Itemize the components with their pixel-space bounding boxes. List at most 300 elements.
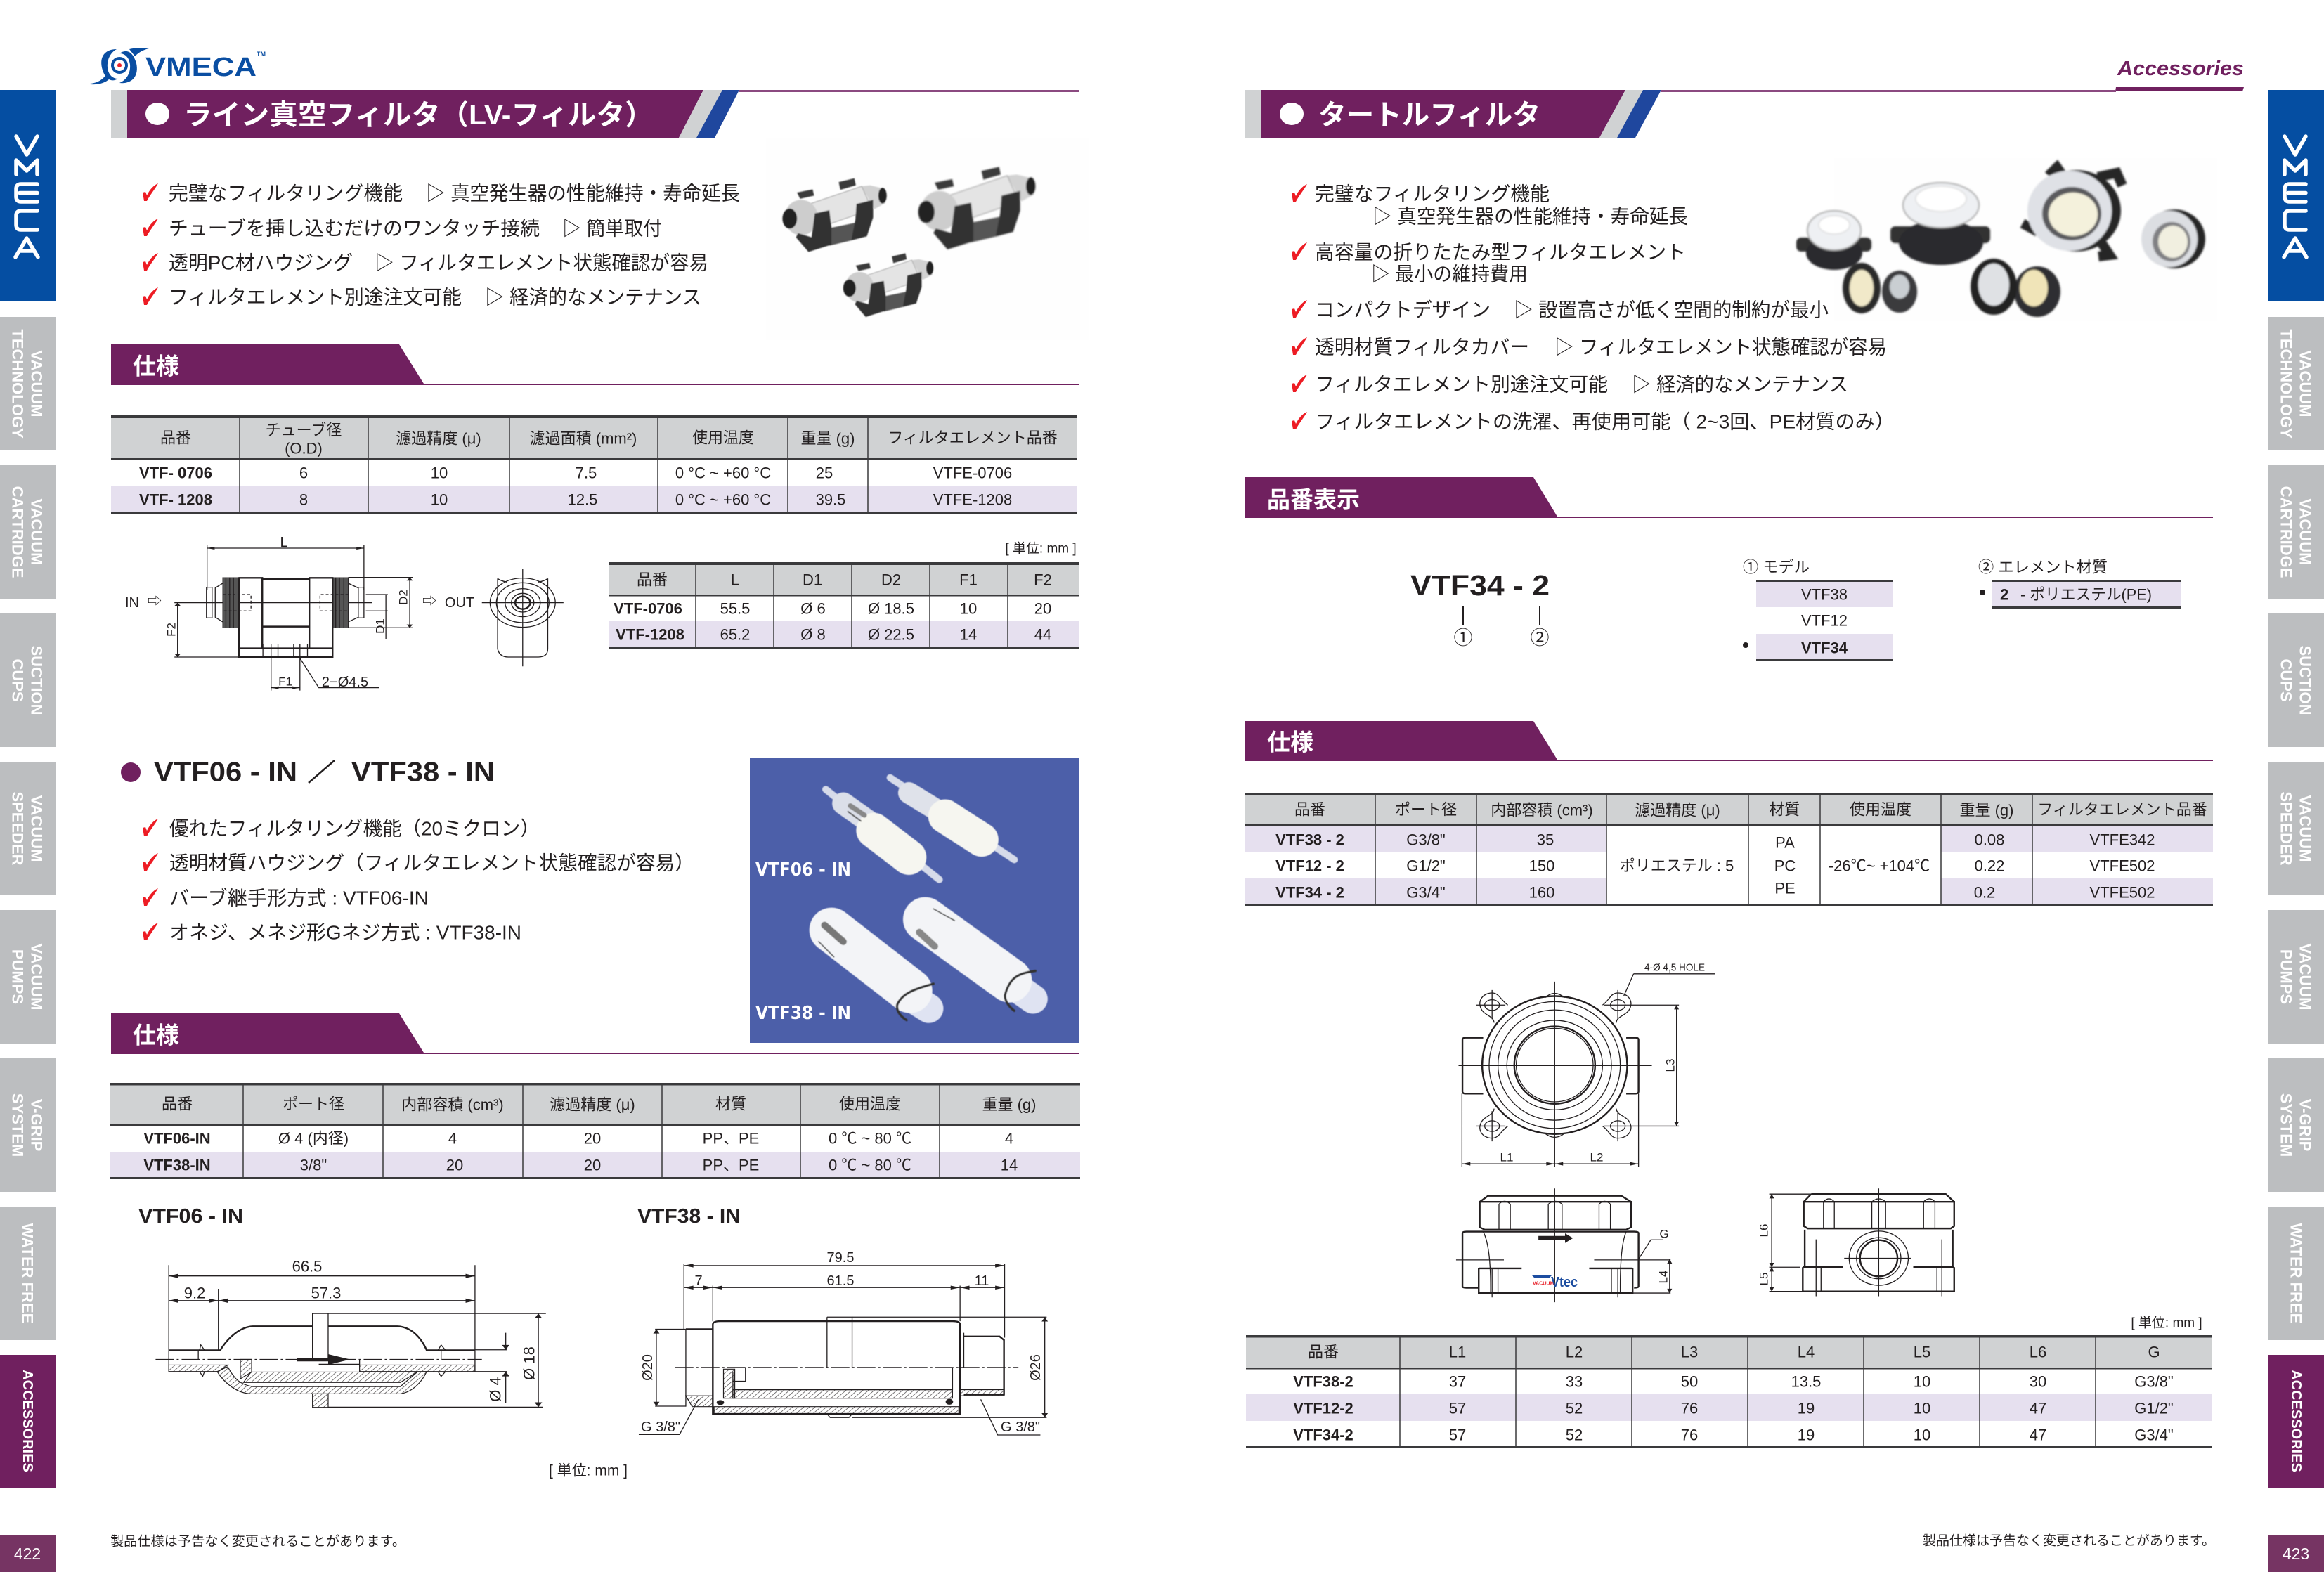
tab: v-grip system: V-GRIP [28, 1099, 45, 1151]
table: turtle filter spec: 0.22 [1975, 857, 2004, 874]
drawing: top view [1458, 974, 1715, 1167]
table: LV filter dimensions: Ø 22.5 [868, 625, 914, 644]
table: VTF-IN spec: 0 ℃ ~ 80 ℃ [829, 1130, 911, 1147]
table: LV filter dimensions: L [731, 571, 739, 589]
table: LV filter spec: 7.5 [576, 464, 597, 482]
feature list: line vacuum filter: 完璧なフィルタリング機能 [169, 183, 403, 204]
tab: vacuum speeder [0, 762, 56, 895]
table: turtle filter dimensions: L1 [1449, 1344, 1466, 1360]
drawing title: VTF38-IN: VTF38 - IN [637, 1205, 741, 1228]
table: turtle filter spec: VTF12 - 2 [1275, 857, 1344, 874]
table: turtle filter dimensions: 76 [1681, 1427, 1698, 1443]
tab: vacuum cartridge: CARTRIDGE [2277, 486, 2295, 578]
tab: accessories: ACCESSORIES [20, 1370, 35, 1472]
table: LV filter spec: (O.D) [285, 440, 323, 457]
table: VTF-IN spec: 20 [446, 1157, 463, 1174]
table: VTF-IN spec: 品番 [162, 1095, 193, 1113]
tab: v-grip system: SYSTEM [2277, 1093, 2295, 1157]
table: turtle filter spec: VTFE502 [2090, 857, 2155, 874]
product: large filter 1 [819, 925, 933, 1020]
table: VTF-IN spec: 0 ℃ ~ 80 ℃ [829, 1157, 911, 1174]
table: turtle filter dimensions: 37 [1449, 1373, 1466, 1390]
table: turtle filter dimensions: 19 [1798, 1427, 1815, 1443]
table: turtle filter spec: VTFE502 [2090, 884, 2155, 901]
drawing: turtle filter views: G [1659, 1227, 1669, 1241]
table: VTF-IN spec: 内部容積 (cm³) [401, 1096, 504, 1113]
feature list: VTF06-IN: 透明材質ハウジング（フィルタエレメント状態確認が容易） [169, 852, 694, 874]
tab: vacuum technology [2268, 317, 2324, 450]
icon: Vtec mark [1532, 1275, 1578, 1290]
sidebar: right [2268, 90, 2324, 1572]
table: turtle filter dimensions: L5 [1914, 1344, 1930, 1360]
tab: suction cups [0, 613, 56, 747]
table: LV filter spec: VTF- 1208 [139, 491, 212, 509]
table: turtle filter dimensions: 品番 [1308, 1344, 1339, 1360]
table: turtle filter dimensions: VTF34-2 [1293, 1427, 1353, 1443]
logo: VMECA [90, 48, 266, 84]
drawing: VTF38-IN section: 11 [975, 1273, 989, 1289]
table: turtle filter spec: G1/2" [1406, 857, 1446, 874]
drawing: turtle filter views: L6 [1757, 1224, 1771, 1237]
feature list: VTF06-IN: バーブ継手形方式 : VTF06-IN [169, 887, 429, 909]
drawing: LV filter dimensions: F2 [164, 623, 178, 637]
table: turtle filter spec: 160 [1529, 884, 1554, 901]
drawing: VTF38-IN section: 7 [694, 1273, 703, 1289]
tab: vacuum pumps: VACUUM [28, 944, 45, 1010]
feature list: turtle filter: フィルタエレメント別途注文可能 [1315, 374, 1608, 395]
tab: accessories [0, 1355, 56, 1488]
tab: vacuum technology: TECHNOLOGY [2277, 329, 2295, 439]
drawing: LV filter dimensions: IN [125, 595, 139, 611]
table: LV filter dimensions: 14 [960, 625, 977, 644]
drawing: VTF06-IN section: Ø 4 [486, 1377, 505, 1402]
drawing: LV filter dimensions [125, 535, 564, 691]
tab: vacuum speeder: SPEEDER [2277, 791, 2295, 866]
table: turtle filter dimensions: L6 [2030, 1344, 2046, 1360]
drawing: LV filter dimensions: ⇨ [148, 594, 162, 609]
table: turtle filter spec: PC [1774, 857, 1796, 874]
table: LV filter spec: 39.5 [816, 491, 845, 509]
tab: vacuum technology: VACUUM [28, 351, 45, 417]
table: VTF-IN spec: 濾過精度 (μ) [550, 1096, 635, 1113]
drawing: VTF38-IN section: 61.5 [827, 1273, 854, 1289]
unit note: [ 単位: mm ] [2131, 1316, 2202, 1331]
feature list: line vacuum filter: 透明PC材ハウジング [169, 252, 353, 274]
legend: element material: - ポリエステル(PE) [2020, 586, 2152, 603]
feature list: turtle filter: コンパクトデザイン [1315, 299, 1491, 320]
tab: suction cups: SUCTION [2297, 645, 2313, 715]
table: LV filter dimensions: F1 [959, 571, 978, 589]
table: LV filter dimensions: 44 [1034, 625, 1051, 644]
tab: vacuum cartridge [2268, 465, 2324, 599]
table: LV filter dimensions: F2 [1034, 571, 1052, 589]
table: LV filter dimensions: D1 [803, 571, 822, 589]
legend: element material: 2 [2000, 586, 2008, 603]
drawing: rear view [1770, 1188, 1954, 1297]
page number 423: 423 [2283, 1545, 2309, 1563]
feature list: line vacuum filter: ▷ 経済的なメンテナンス [485, 287, 701, 308]
drawing: LV filter dimensions: OUT [445, 595, 474, 611]
table: LV filter dimensions: VTF-1208 [616, 625, 684, 644]
table: LV filter spec: 品番 [160, 429, 191, 447]
table: LV filter spec: 10 [431, 491, 448, 509]
product: turtle small [1796, 211, 1871, 270]
feature list: turtle filter: ▷ フィルタエレメント状態確認が容易 [1554, 336, 1887, 358]
drawing title: VTF06-IN: VTF06 - IN [138, 1205, 243, 1228]
drawing: VTF38-IN section [639, 1250, 1048, 1435]
tab: vacuum technology: TECHNOLOGY [8, 329, 27, 439]
drawing: turtle filter views: L2 [1590, 1151, 1603, 1164]
tab: water free [2268, 1207, 2324, 1340]
drawing: LV filter dimensions: ⇨ [422, 594, 436, 609]
table: turtle filter dimensions: 30 [2030, 1373, 2046, 1390]
table: turtle filter dimensions: 19 [1798, 1400, 1815, 1417]
heading: VTF06-IN / VTF38-IN [121, 758, 495, 787]
table: LV filter spec: 8 [299, 491, 308, 509]
table: LV filter dimensions: 20 [1034, 600, 1051, 617]
tab: v-grip system: SYSTEM [8, 1093, 27, 1157]
tab: suction cups: CUPS [2277, 658, 2295, 702]
table: LV filter spec: 6 [299, 464, 308, 482]
tab: v-grip system: V-GRIP [2297, 1099, 2313, 1151]
table: LV filter spec: チューブ径 [266, 422, 342, 439]
table: turtle filter spec: PA [1775, 833, 1795, 852]
table: turtle filter dimensions: 50 [1681, 1373, 1698, 1390]
section bar: spec 3: 仕様 [1267, 729, 1313, 755]
logo: VMECA: TM [257, 51, 266, 58]
table: turtle filter dimensions: 33 [1566, 1373, 1583, 1390]
table: turtle filter dimensions: 47 [2030, 1427, 2046, 1443]
feature list: line vacuum filter: ▷ 簡単取付 [562, 218, 662, 239]
table: LV filter dimensions: Ø 6 [800, 600, 826, 617]
legend: element material [1978, 558, 2181, 609]
product: filter small [843, 253, 933, 317]
legend: model: VTF34 [1801, 639, 1848, 656]
feature list: line vacuum filter [143, 183, 740, 308]
drawing: VTF06-IN section: Ø 18 [520, 1346, 538, 1380]
table: turtle filter dimensions: G3/8" [2134, 1373, 2174, 1390]
table: turtle filter dimensions: L2 [1566, 1344, 1583, 1360]
section bar: spec 1: 仕様 [133, 353, 179, 379]
drawing: LV filter dimensions: L [280, 535, 288, 550]
feature list: turtle filter: 透明材質フィルタカバー [1315, 336, 1529, 358]
table: VTF-IN spec: 材質 [715, 1095, 746, 1113]
table: LV filter spec: 濾過面積 (mm²) [530, 430, 637, 447]
section bar: spec 1 [111, 344, 1079, 385]
table: VTF-IN spec [110, 1083, 1080, 1179]
page tag: Accessories: Accessories [2117, 58, 2244, 80]
table: LV filter dimensions: 65.2 [720, 625, 750, 644]
drawing: VTF06-IN section: 9.2 [184, 1285, 205, 1301]
table: turtle filter spec: VTF34 - 2 [1275, 884, 1344, 901]
product: filter left [782, 178, 887, 252]
table: VTF-IN spec: 14 [1001, 1157, 1018, 1174]
table: turtle filter spec: 0.2 [1974, 884, 1995, 901]
drawing: VTF06-IN section [155, 1258, 546, 1408]
page number 422: 422 [14, 1545, 41, 1563]
table: turtle filter dimensions: VTF38-2 [1293, 1373, 1353, 1390]
table: VTF-IN spec: VTF06-IN [143, 1130, 211, 1147]
product: large filter 2 [919, 909, 1035, 1011]
heading: turtle filter: タートルフィルタ [1318, 100, 1540, 131]
table: LV filter dimensions: 品番 [637, 571, 668, 589]
table: VTF-IN spec: 20 [584, 1130, 601, 1147]
part number code: VTF34 - 2 [1410, 569, 1550, 602]
drawing: VTF38-IN section: Ø26 [1028, 1354, 1044, 1381]
table: VTF-IN spec: 使用温度 [839, 1095, 901, 1113]
unit note: [ 単位: mm ] [549, 1463, 628, 1479]
table: LV filter dimensions: VTF-0706 [614, 600, 682, 617]
tab: VMECA brand [2268, 90, 2324, 301]
table: LV filter dimensions: 10 [960, 600, 977, 617]
drawing: side view [1456, 1188, 1672, 1302]
table: VTF-IN spec: ポート径 [283, 1095, 344, 1113]
footer note: right: 製品仕様は予告なく変更されることがあります。 [1923, 1533, 2215, 1549]
drawing: VTF38-IN section: Ø20 [640, 1354, 656, 1381]
legend: model: VTF38 [1801, 586, 1848, 603]
drawing: turtle filter views: L4 [1657, 1271, 1670, 1283]
section bar: spec 2: 仕様 [133, 1022, 179, 1048]
tab: vacuum cartridge [0, 465, 56, 599]
table: turtle filter spec: 内部容積 (cm³) [1491, 801, 1593, 819]
photo: line vacuum filters [766, 138, 1089, 339]
table: turtle filter spec: 35 [1537, 831, 1554, 849]
table: turtle filter dimensions: 57 [1449, 1400, 1466, 1417]
tab: suction cups [2268, 613, 2324, 747]
product: turtle large [1890, 183, 1990, 265]
tab: v-grip system [2268, 1058, 2324, 1192]
table: turtle filter dimensions: 10 [1914, 1427, 1930, 1443]
table: turtle filter spec [1245, 793, 2213, 906]
product: turtle front view large [2023, 167, 2122, 256]
drawing: turtle filter views: 4-Ø 4,5 HOLE [1644, 961, 1705, 974]
table: turtle filter spec: G3/8" [1406, 831, 1446, 849]
sidebar: left [0, 90, 56, 1572]
tab: water free: WATER FREE [2287, 1223, 2305, 1323]
photo: VTF06-IN and VTF38-IN [750, 758, 1079, 1043]
photo: VTF06-IN and VTF38-IN: VTF06 - IN [755, 859, 851, 881]
table: LV filter spec: 10 [431, 464, 448, 482]
table: turtle filter spec: ポリエステル : 5 [1620, 857, 1734, 874]
table: LV filter dimensions: Ø 18.5 [868, 600, 914, 617]
table: turtle filter dimensions [1246, 1335, 2212, 1448]
heading: VTF06-IN / VTF38-IN: VTF38 - IN [351, 758, 495, 787]
drawing: VTF38-IN section: 79.5 [827, 1250, 854, 1266]
tab: suction cups: SUCTION [28, 645, 45, 715]
legend: model: VTF12 [1801, 611, 1848, 630]
table: turtle filter dimensions: 52 [1566, 1400, 1583, 1417]
tab: VMECA brand [0, 90, 56, 301]
table: LV filter spec: VTF- 0706 [139, 464, 212, 482]
table: turtle filter spec: フィルタエレメント品番 [2037, 801, 2207, 818]
tab: accessories: ACCESSORIES [2288, 1370, 2304, 1472]
feature list: turtle filter: 高容量の折りたたみ型フィルタエレメント [1315, 242, 1686, 263]
drawing: LV filter dimensions: D1 [374, 618, 387, 634]
feature list: VTF06-IN: オネジ、メネジ形Gネジ方式 : VTF38-IN [169, 922, 521, 943]
feature list: turtle filter: ▷ 経済的なメンテナンス [1632, 374, 1848, 395]
table: LV filter spec: 12.5 [568, 491, 597, 509]
part number code: ② [1531, 628, 1549, 649]
table: VTF-IN spec: VTF38-IN [143, 1157, 211, 1174]
table: turtle filter dimensions: 76 [1681, 1400, 1698, 1417]
table: turtle filter spec: PE [1774, 880, 1796, 897]
tab: vacuum pumps: PUMPS [8, 949, 27, 1004]
tab: vacuum pumps: VACUUM [2297, 944, 2313, 1010]
table: turtle filter spec: -26℃~ +104℃ [1829, 857, 1930, 874]
product: small filter 2 [890, 778, 1014, 859]
table: turtle filter spec: VTF38 - 2 [1275, 831, 1344, 849]
product: turtle front view small [2141, 209, 2205, 268]
part number code: ① [1453, 628, 1473, 649]
feature list: line vacuum filter: ▷ フィルタエレメント状態確認が容易 [375, 252, 708, 274]
feature list: line vacuum filter: ▷ 真空発生器の性能維持・寿命延長 [426, 183, 740, 204]
tab: vacuum pumps: PUMPS [2277, 949, 2295, 1004]
section bar: spec 2 [111, 1013, 1079, 1054]
feature list: line vacuum filter: フィルタエレメント別途注文可能 [169, 287, 462, 308]
section bar: part number: 品番表示 [1267, 486, 1360, 513]
feature list: VTF06-IN [143, 818, 694, 943]
tab: vacuum speeder: VACUUM [2297, 795, 2313, 862]
table: LV filter spec: VTFE-1208 [933, 491, 1012, 509]
product: small filter 1 [826, 789, 940, 880]
drawing: turtle filter views: L1 [1500, 1151, 1513, 1164]
drawing: LV filter dimensions: 2−Ø4.5 [322, 675, 368, 690]
table: VTF-IN spec: 20 [584, 1157, 601, 1174]
tab: vacuum cartridge: VACUUM [2297, 499, 2313, 565]
drawing: turtle filter views [1456, 961, 1954, 1302]
feature list: turtle filter: 完璧なフィルタリング機能 [1315, 183, 1550, 205]
table: turtle filter spec: 0.08 [1975, 831, 2004, 849]
photo: VTF06-IN and VTF38-IN: VTF38 - IN [755, 1003, 851, 1024]
tab: vacuum technology [0, 317, 56, 450]
table: VTF-IN spec: PP、PE [703, 1130, 759, 1147]
table: turtle filter dimensions: L3 [1681, 1344, 1698, 1360]
heading: line vacuum filter: ライン真空フィルタ（LV-フィルタ） [183, 100, 654, 131]
table: turtle filter spec: 重量 (g) [1959, 801, 2014, 819]
page number 423 [2268, 1535, 2324, 1572]
page number 422 [0, 1535, 56, 1572]
table: turtle filter spec: 材質 [1769, 801, 1800, 818]
tab: vacuum speeder [2268, 762, 2324, 895]
page tag: Accessories [2115, 58, 2244, 91]
table: LV filter spec: 0 °C ~ +60 °C [675, 491, 771, 509]
table: VTF-IN spec: 4 [1005, 1130, 1013, 1147]
legend: model [1743, 558, 1893, 661]
table: VTF-IN spec: Ø 4 (内径) [278, 1130, 349, 1147]
table: turtle filter dimensions: 10 [1914, 1400, 1930, 1417]
tab: accessories [2268, 1355, 2324, 1488]
table: turtle filter spec: 使用温度 [1850, 801, 1911, 818]
tab: vacuum technology: VACUUM [2297, 351, 2313, 417]
table: VTF-IN spec: 4 [448, 1130, 457, 1147]
tab: vacuum speeder: SPEEDER [8, 791, 27, 866]
table: LV filter spec: 25 [816, 464, 833, 482]
feature list: line vacuum filter: チューブを挿し込むだけのワンタッチ接続 [169, 218, 540, 239]
table: LV filter spec [111, 415, 1077, 514]
part number code [1410, 569, 1550, 649]
table: LV filter spec: 濾過精度 (μ) [396, 430, 481, 447]
drawing: LV filter dimensions: F1 [278, 675, 292, 689]
feature list: turtle filter: ▷ 真空発生器の性能維持・寿命延長 [1372, 205, 1688, 228]
photo: turtle filters [1796, 158, 2217, 321]
section bar: spec 3 [1245, 721, 2213, 761]
drawing: LV filter dimensions: D2 [396, 590, 410, 605]
product: filter right [918, 167, 1035, 249]
feature list: turtle filter: フィルタエレメントの洗濯、再使用可能（ 2~3回、PE材質のみ） [1315, 410, 1895, 433]
table: turtle filter dimensions: 10 [1914, 1373, 1930, 1390]
table: turtle filter spec: 濾過精度 (μ) [1635, 801, 1720, 819]
drawing: VTF38-IN section: G 3/8" [641, 1420, 680, 1435]
drawing: VTF38-IN section: G 3/8" [1001, 1420, 1040, 1435]
drawing: VTF06-IN section: 66.5 [292, 1258, 322, 1275]
table: LV filter dimensions [609, 562, 1079, 649]
table: turtle filter spec: G3/4" [1406, 884, 1446, 901]
tab: suction cups: CUPS [8, 658, 27, 702]
table: turtle filter dimensions: 57 [1449, 1427, 1466, 1443]
section bar: part number [1245, 477, 2213, 518]
table: turtle filter dimensions: G [2148, 1344, 2160, 1360]
tab: water free [0, 1207, 56, 1340]
tab: vacuum cartridge: CARTRIDGE [8, 486, 27, 578]
icon: Vtec mark: VACUUM [1533, 1282, 1554, 1286]
unit note: [ 単位: mm ] [1005, 541, 1077, 557]
drawing: turtle filter views: L5 [1757, 1273, 1771, 1285]
table: turtle filter spec: VTFE342 [2090, 831, 2155, 849]
table: turtle filter dimensions: VTF12-2 [1293, 1400, 1353, 1417]
feature list: turtle filter: ▷ 最小の維持費用 [1371, 263, 1528, 285]
table: turtle filter spec: ポート径 [1395, 801, 1457, 818]
table: turtle filter dimensions: 52 [1566, 1427, 1583, 1443]
logo: VMECA: VMECA [145, 53, 257, 82]
table: LV filter spec: 0 °C ~ +60 °C [675, 464, 771, 482]
table: turtle filter dimensions: G3/4" [2134, 1427, 2174, 1443]
table: turtle filter dimensions: 13.5 [1791, 1373, 1821, 1390]
tab: vacuum pumps [0, 910, 56, 1044]
feature list: turtle filter [1292, 183, 1895, 433]
table: turtle filter spec: 150 [1529, 857, 1554, 874]
table: LV filter spec: VTFE-0706 [933, 464, 1012, 482]
product: filter elements [1843, 259, 2060, 317]
legend: model: ① モデル [1743, 558, 1810, 576]
table: turtle filter dimensions: 47 [2030, 1400, 2046, 1417]
feature list: VTF06-IN: 優れたフィルタリング機能（20ミクロン） [169, 818, 540, 839]
table: turtle filter dimensions: G1/2" [2134, 1400, 2174, 1417]
table: VTF-IN spec: 重量 (g) [982, 1096, 1037, 1113]
tab: v-grip system [0, 1058, 56, 1192]
drawing: VTF06-IN section: 57.3 [311, 1285, 341, 1301]
table: LV filter spec: 重量 (g) [800, 430, 855, 447]
table: LV filter dimensions: Ø 8 [800, 625, 826, 644]
table: LV filter spec: 使用温度 [692, 429, 754, 447]
table: turtle filter dimensions: L4 [1798, 1344, 1815, 1360]
table: VTF-IN spec: PP、PE [703, 1157, 759, 1174]
table: LV filter spec: フィルタエレメント品番 [888, 429, 1058, 447]
tab: vacuum pumps [2268, 910, 2324, 1044]
feature list: turtle filter: ▷ 設置高さが低く空間的制約が最小 [1514, 299, 1829, 320]
table: turtle filter spec: 品番 [1294, 801, 1325, 818]
heading: VTF06-IN / VTF38-IN: VTF06 - IN [154, 758, 297, 787]
heading: turtle filter [1245, 90, 2116, 138]
drawing: turtle filter views: L3 [1664, 1059, 1677, 1072]
heading: line vacuum filter [111, 90, 1079, 138]
table: LV filter dimensions: 55.5 [720, 600, 750, 617]
legend: element material: ② エレメント材質 [1978, 558, 2108, 576]
tab: vacuum cartridge: VACUUM [28, 499, 45, 565]
table: LV filter dimensions: D2 [881, 571, 901, 589]
footer note: left: 製品仕様は予告なく変更されることがあります。 [110, 1533, 405, 1549]
icon: Vtec mark: Vtec [1551, 1275, 1578, 1290]
tab: vacuum speeder: VACUUM [28, 795, 45, 862]
